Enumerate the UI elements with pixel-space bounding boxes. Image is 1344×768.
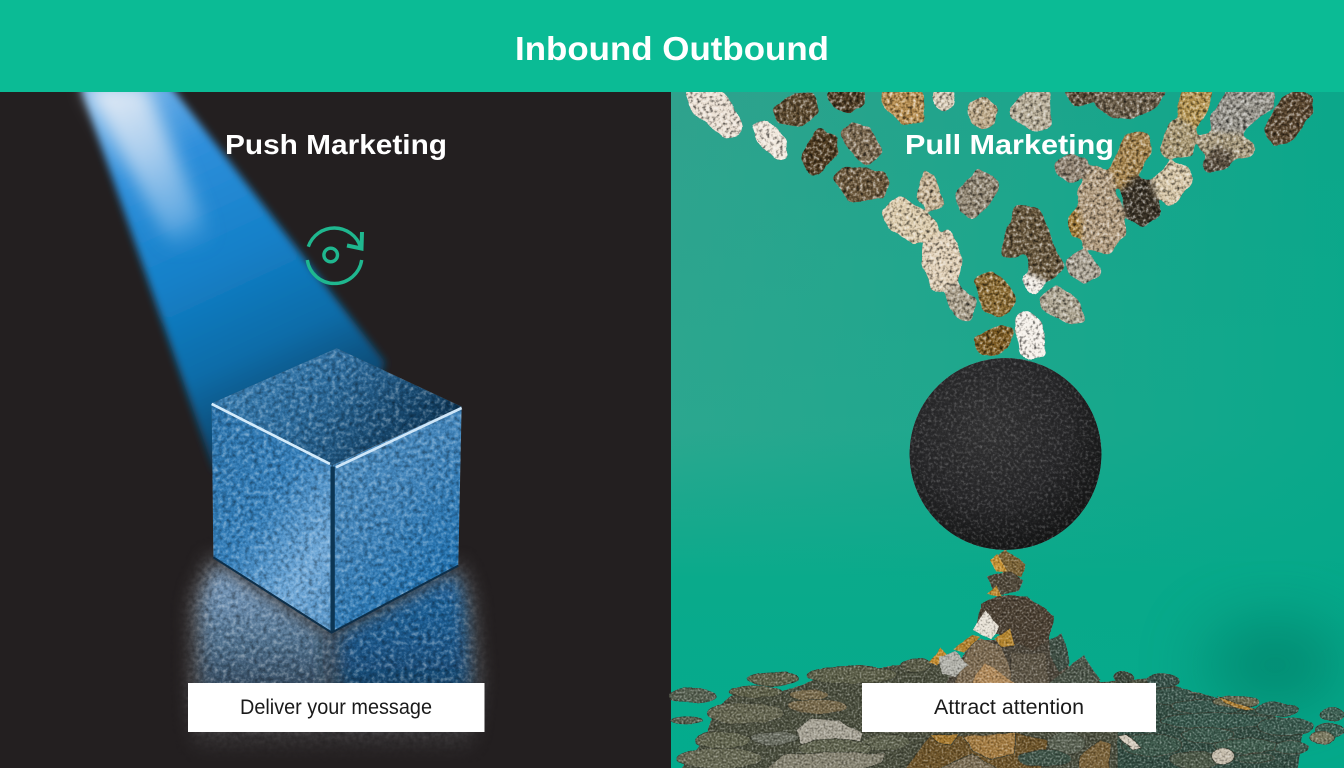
heading: push marketing: Push Marketing [225, 129, 447, 160]
wall shadow [1205, 625, 1344, 705]
icon: rotate around target [307, 228, 362, 283]
header banner [0, 0, 1344, 92]
callout: deliver your message [188, 683, 484, 732]
rock column under the ball [929, 549, 1101, 683]
heading: pull marketing: Pull Marketing [905, 129, 1114, 160]
cube reflection on floor [195, 557, 476, 750]
panel: push marketing [0, 85, 671, 768]
title: Inbound Outbound [515, 30, 829, 67]
callout: attract attention: Attract attention [934, 696, 1084, 719]
falling rock fragments [685, 90, 1313, 359]
callout: attract attention [862, 683, 1156, 732]
rock pile on the ground [670, 658, 1344, 768]
spotlight beam [80, 85, 385, 480]
black sphere [910, 358, 1102, 550]
callout: deliver your message: Deliver your message [240, 696, 432, 719]
metal cube [212, 348, 462, 633]
panel: pull marketing [670, 90, 1344, 768]
